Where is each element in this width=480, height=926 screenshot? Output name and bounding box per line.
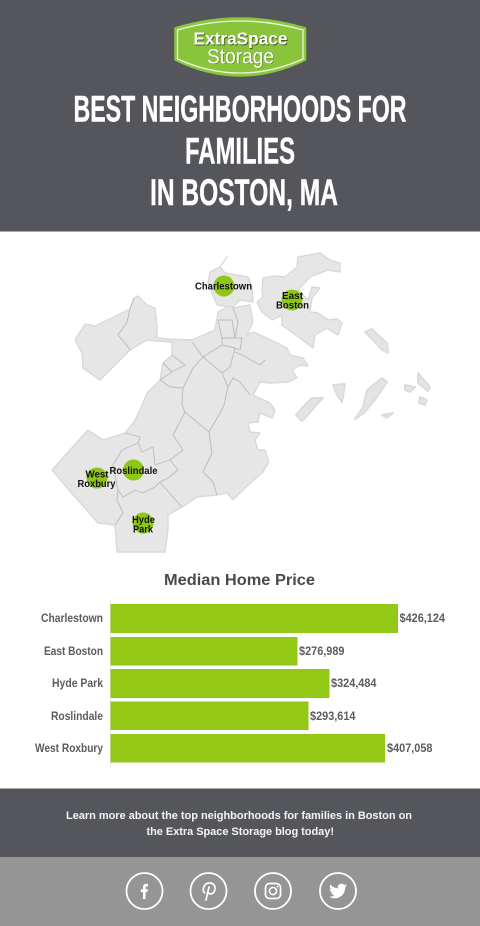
- icon: Pinterest: [190, 873, 226, 909]
- bar chart: median home price: [35, 600, 446, 768]
- bar: West Roxbury: West Roxbury: [35, 743, 104, 755]
- map marker: East Boston: [276, 290, 309, 312]
- bar: East Boston: East Boston: [44, 646, 103, 658]
- chart heading: Median Home Price: [164, 572, 315, 589]
- panel: call to action: [0, 788, 480, 857]
- map: harbor islands: [296, 329, 430, 421]
- map marker: Charlestown: Charlestown: [195, 282, 252, 292]
- title: [74, 88, 406, 213]
- map marker: Hyde Park: Park: [133, 524, 153, 536]
- bar: Charlestown: [41, 604, 446, 633]
- title: FAMILIES: [185, 130, 295, 172]
- map marker: West Roxbury: Roxbury: [78, 479, 116, 490]
- map marker: Hyde Park: Hyde: [132, 515, 155, 526]
- map: East Boston area: [257, 253, 342, 348]
- bar: Hyde Park: $324,484: [331, 678, 377, 690]
- map marker: West Roxbury: [78, 468, 116, 490]
- logo: Extra Space Storage: [175, 18, 306, 76]
- call to action text: [66, 810, 412, 838]
- map marker: Roslindale: [110, 460, 158, 480]
- icon: Facebook: [126, 873, 162, 909]
- bar: Roslindale: $293,614: [310, 711, 356, 723]
- bar: Charlestown: $426,124: [400, 613, 446, 625]
- logo: Extra Space Storage: ExtraSpace: [194, 29, 289, 49]
- bar: East Boston: $276,989: [299, 646, 344, 658]
- bar: Hyde Park: [52, 669, 377, 698]
- call to action text: Learn more about the top neighborhoods for families in Boston on: [66, 810, 412, 822]
- icon: Instagram: [255, 873, 291, 909]
- map of Boston: [52, 253, 430, 552]
- map marker: West Roxbury: West: [86, 470, 109, 480]
- logo: Extra Space Storage: ExtraSpace: [194, 28, 288, 48]
- call to action text: the Extra Space Storage blog today!: [146, 826, 334, 838]
- map: main land area: [52, 296, 308, 552]
- bar: West Roxbury: $407,058: [387, 743, 433, 755]
- bar: Hyde Park: Hyde Park: [52, 678, 104, 690]
- logo: Extra Space Storage: Storage: [207, 46, 274, 68]
- map marker: Hyde Park: [132, 512, 155, 536]
- panel: social links: [0, 857, 480, 926]
- bar: Roslindale: Roslindale: [51, 711, 103, 723]
- bar: East Boston: [44, 637, 344, 666]
- map marker: East Boston: East: [282, 291, 304, 302]
- map: Charlestown area: [208, 257, 253, 307]
- map marker: Charlestown: [195, 276, 252, 296]
- icon: Twitter: [320, 873, 356, 909]
- map: neighborhood borders: [113, 298, 265, 525]
- panel: header: [0, 0, 480, 232]
- logo: Extra Space Storage: Storage: [208, 46, 275, 69]
- bar: Charlestown: Charlestown: [41, 613, 103, 625]
- title: IN BOSTON, MA: [150, 171, 338, 213]
- map marker: East Boston: Boston: [276, 300, 309, 312]
- bar: Roslindale: [51, 702, 356, 730]
- map marker: Roslindale: Roslindale: [110, 466, 158, 477]
- bar: West Roxbury: [35, 734, 433, 762]
